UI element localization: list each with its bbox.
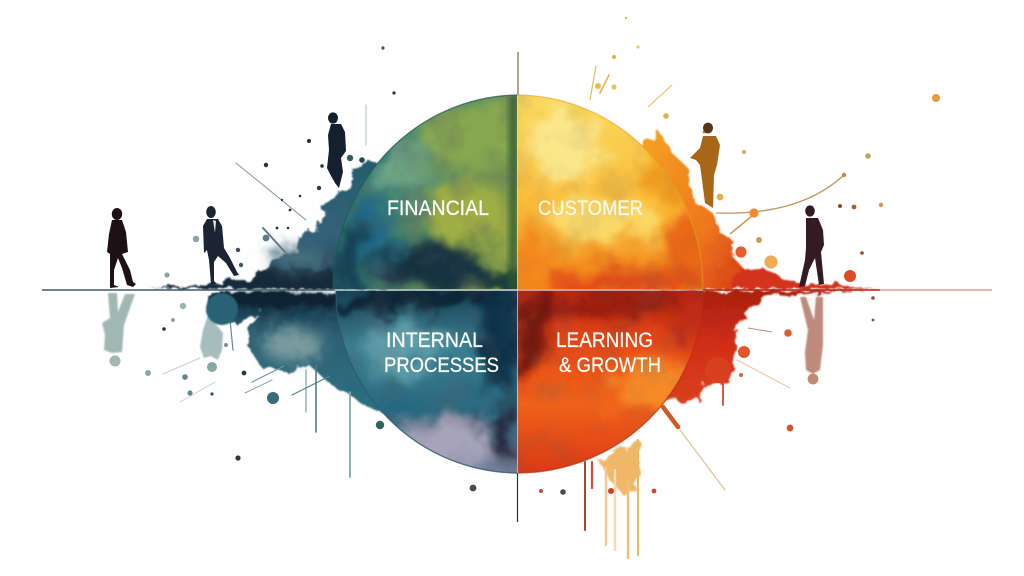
splash: upper right ink [630, 132, 880, 289]
person 1 silhouette [107, 208, 136, 288]
horizontal axis [42, 289, 992, 291]
quadrant: customer [517, 95, 702, 289]
label: learning: LEARNING [556, 329, 653, 352]
label: customer: CUSTOMER [538, 197, 643, 220]
label: processes: PROCESSES [384, 354, 499, 377]
circle quadrants [333, 95, 703, 473]
person 2 silhouette [203, 206, 239, 284]
person 4 silhouette [690, 123, 720, 208]
label: internal: INTERNAL [386, 329, 483, 352]
splash: upper left ink [150, 158, 400, 289]
spatter: left dots [110, 46, 476, 491]
splash: lower right ink [660, 291, 870, 400]
drips: teal [163, 75, 609, 477]
circle outline [333, 95, 703, 473]
person 3 silhouette [327, 112, 346, 188]
label: and growth: & GROWTH [559, 354, 661, 377]
thin orange spatter arcs [590, 66, 844, 332]
reflection blob: person 2 [206, 293, 238, 325]
quadrant: internal processes [336, 291, 517, 473]
person 5 silhouette [799, 205, 824, 287]
quadrant: learning and growth [517, 291, 703, 473]
drips: orange [585, 360, 790, 558]
spatter: right dots [539, 17, 940, 495]
reflection: person 5 [800, 297, 823, 374]
reflection: person 2 [200, 312, 223, 360]
reflection ball: person 5 [808, 374, 818, 384]
splash: lower left ink [205, 292, 420, 430]
quadrant: financial [333, 95, 517, 289]
vertical axis [516, 52, 519, 522]
label: financial: FINANCIAL [387, 197, 489, 220]
reflection: person 1 [102, 293, 135, 353]
